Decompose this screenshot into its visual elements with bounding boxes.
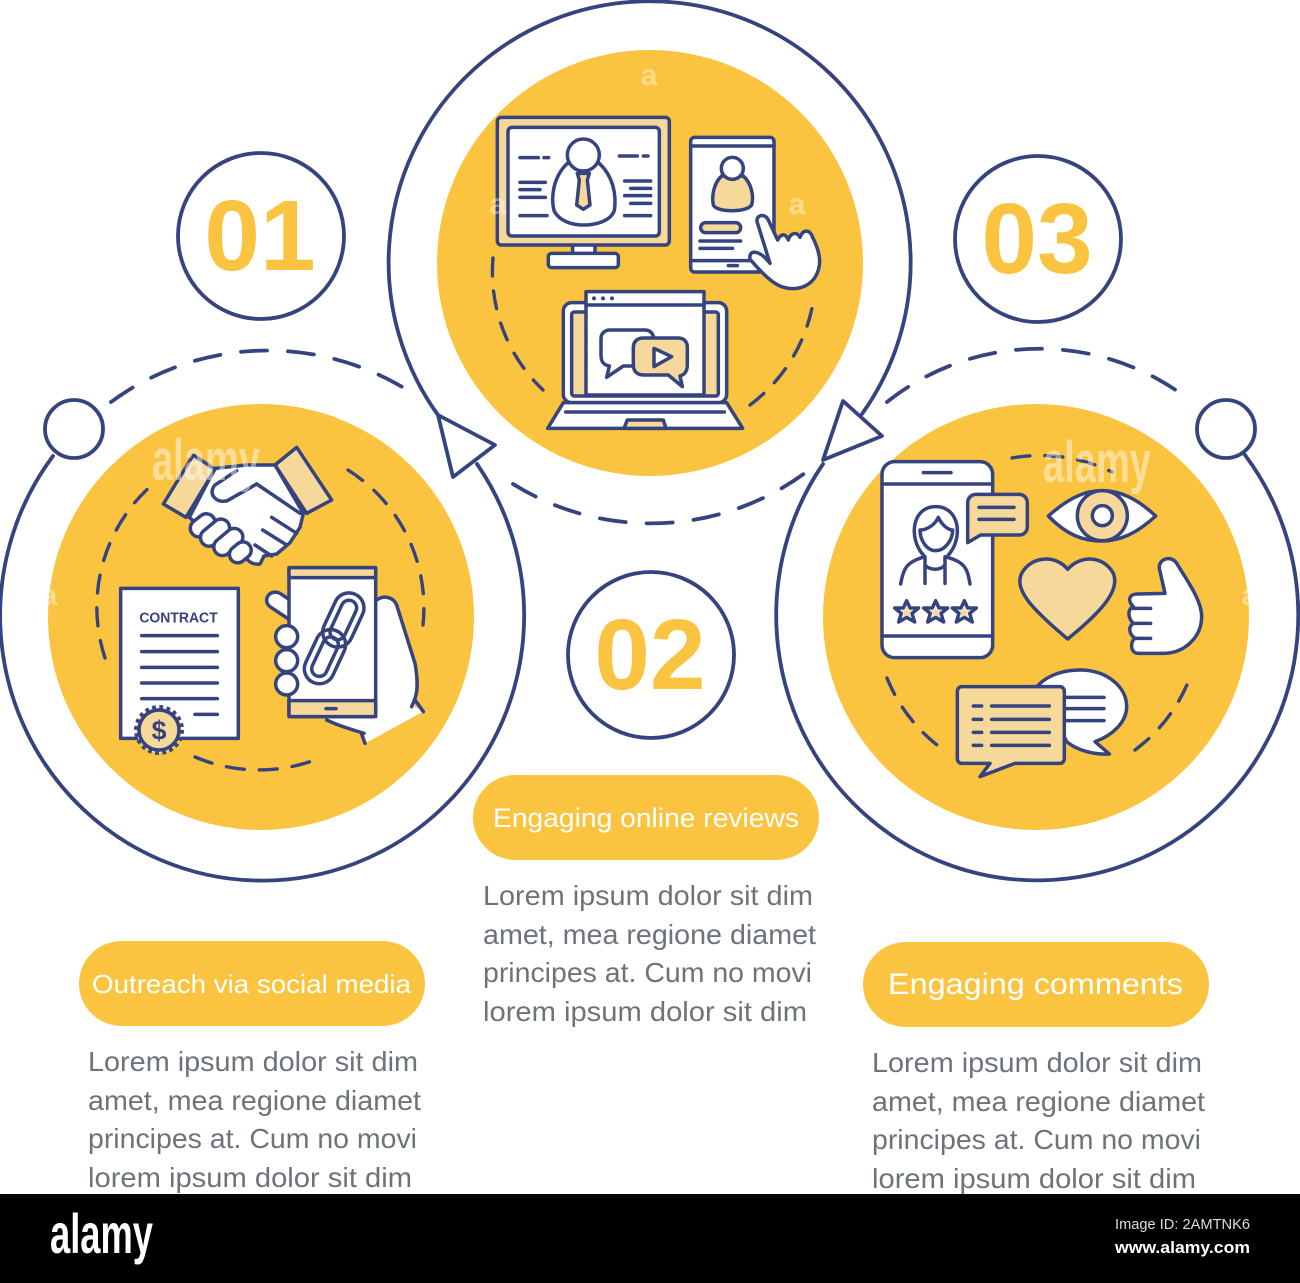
body text: step 2: principes at. Cum no movi (483, 957, 812, 988)
watermarks: alamy (152, 428, 260, 493)
heading pill: step 3: Engaging comments (888, 968, 1183, 1001)
ring: step 1 (0, 456, 524, 881)
yellow circle: step 1 (48, 404, 474, 830)
body text: step 3: amet, mea regione diamet (872, 1086, 1205, 1117)
dashed arc: step 3 top (887, 349, 1180, 402)
icon: comment bubbles (957, 670, 1127, 777)
number badge 03: 03 (981, 183, 1093, 295)
watermarks (41, 59, 1259, 612)
inner dashes: step 1 (97, 470, 424, 770)
ring: step 3 (776, 455, 1298, 880)
heading pill: step 2: Engaging online reviews (493, 803, 799, 833)
body text: step 3: principes at. Cum no movi (872, 1124, 1201, 1155)
body text: step 2 (483, 880, 816, 1027)
body text: step 1: Lorem ipsum dolor sit dim (88, 1046, 418, 1077)
body text: step 1 (88, 1046, 421, 1193)
body text: step 3: lorem ipsum dolor sit dim (872, 1163, 1196, 1194)
icon: thumbs up (1129, 559, 1202, 653)
icon: phone with reviewer and stars (882, 462, 993, 658)
footer bar: alamy (50, 1202, 153, 1265)
inner dashes: step 3 (887, 455, 1192, 750)
ring: step 2 (389, 1, 911, 415)
icon: monitor with profile (497, 117, 669, 268)
footer bar: www.alamy.com (1114, 1238, 1250, 1257)
body text: step 2: Lorem ipsum dolor sit dim (483, 880, 813, 911)
watermarks: a (1242, 579, 1259, 612)
footer bar (0, 1194, 1300, 1283)
watermarks: a (641, 59, 658, 92)
number badge 02 (568, 572, 734, 738)
arrow: step 1 to step 2 (438, 415, 495, 477)
icon: contract document: $ (152, 715, 167, 745)
watermarks: a (41, 579, 58, 612)
connector node left (45, 400, 103, 458)
footer bar: Image ID: 2AMTNK6 (1115, 1216, 1250, 1233)
number badge 02: 02 (594, 599, 706, 711)
dashed arc: step 2 bottom (513, 473, 805, 523)
dashed arc: step 1 top (111, 350, 415, 402)
icon: laptop with video chat (548, 292, 743, 428)
arrow: step 2 to step 3 (823, 401, 882, 460)
icon: speech bubble on phone (968, 494, 1027, 543)
body text: step 3 (872, 1047, 1205, 1194)
yellow circle: step 3 (823, 404, 1249, 830)
watermarks: a (490, 188, 507, 221)
body text: step 3: Lorem ipsum dolor sit dim (872, 1047, 1202, 1078)
icon: contract document (121, 588, 238, 753)
yellow circle: step 2 (437, 50, 863, 476)
number badge 01 (178, 153, 344, 319)
icon: tablet with pointing hand (691, 137, 820, 289)
body text: step 1: principes at. Cum no movi (88, 1123, 417, 1154)
heading pill: step 1: Outreach via social media (92, 969, 412, 999)
body text: step 2: lorem ipsum dolor sit dim (483, 996, 807, 1027)
icon: heart (1020, 559, 1115, 639)
icon: eye (1048, 491, 1156, 541)
watermarks: a (789, 188, 806, 221)
connector node right (1197, 400, 1255, 458)
heading pill: step 3 (863, 942, 1209, 1027)
icon: hand holding phone with link (267, 568, 423, 743)
watermarks: alamy (1043, 430, 1151, 495)
body text: step 1: lorem ipsum dolor sit dim (88, 1162, 412, 1193)
heading pill: step 2 (473, 775, 819, 860)
inner dashes: step 2 (492, 258, 812, 405)
contract label: CONTRACT (139, 610, 218, 626)
number badge 03 (955, 156, 1121, 322)
body text: step 2: amet, mea regione diamet (483, 919, 816, 950)
body text: step 1: amet, mea regione diamet (88, 1085, 421, 1116)
number badge 01: 01 (204, 180, 316, 292)
heading pill: step 1 (79, 941, 425, 1026)
icon: handshake (163, 447, 332, 566)
